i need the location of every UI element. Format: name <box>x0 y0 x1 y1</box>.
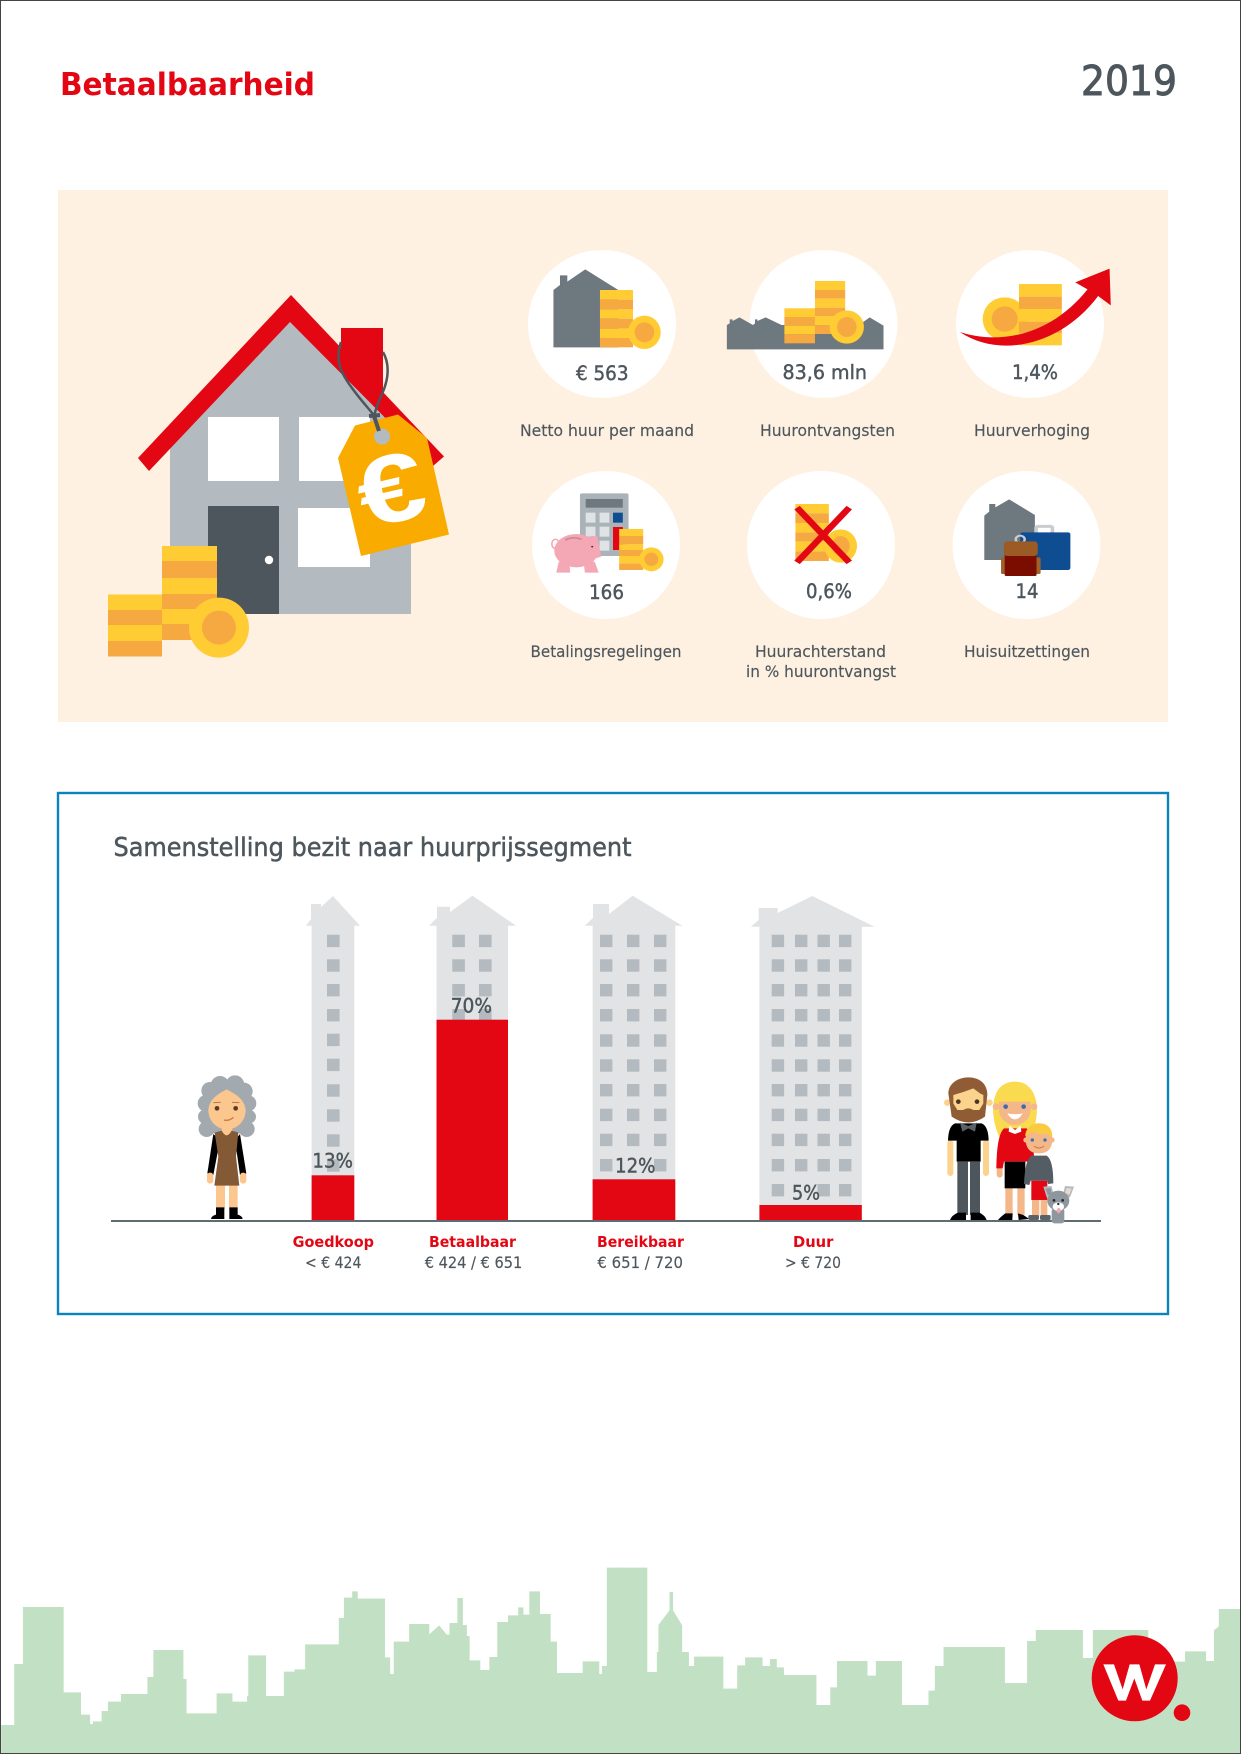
panel: kerncijfers <box>58 190 1168 722</box>
category: bereikbaar: Bereikbaar <box>597 1233 684 1251</box>
category: bereikbaar: € 651 / 720 <box>597 1253 683 1272</box>
man <box>944 1077 993 1220</box>
tower: bereikbaar: 12% <box>615 1155 656 1178</box>
skyline <box>1 1568 1240 1754</box>
circle: huurontvangsten <box>750 250 898 398</box>
label: betalingsregelingen: Betalingsregelingen <box>530 642 682 661</box>
label: huurontvangsten: Huurontvangsten <box>760 421 895 440</box>
tower: duur <box>751 896 874 1220</box>
icon: coins with rising arrow <box>960 269 1111 346</box>
panel: samenstelling bezit <box>58 793 1168 1314</box>
circle: huisuitzettingen <box>952 471 1100 619</box>
value: netto huur: € 563 <box>576 362 628 385</box>
category: betaalbaar <box>425 1233 522 1272</box>
category: betaalbaar: € 424 / € 651 <box>425 1253 522 1272</box>
tower: bereikbaar <box>585 896 682 1220</box>
dog <box>1043 1186 1074 1223</box>
category: duur <box>785 1233 841 1272</box>
tower chart <box>111 896 1101 1222</box>
label: huurachterstand in % huurontvangst: Huurachterstand <box>755 642 886 661</box>
value: huurverhoging: 1,4% <box>1012 361 1058 384</box>
icon: calculator, piggy bank and coins <box>552 493 664 573</box>
illustration: house with price tag and coins: € <box>346 430 436 549</box>
logo: W. <box>1092 1635 1190 1721</box>
circle: huurverhoging <box>956 250 1104 398</box>
category: bereikbaar <box>597 1233 684 1272</box>
figure: family with dog <box>944 1077 1074 1223</box>
title: Betaalbaarheid <box>60 67 315 103</box>
tower: goedkoop <box>306 896 360 1220</box>
label: huurachterstand in % huurontvangst: in % huurontvangst <box>746 662 896 681</box>
label: netto huur per maand: Netto huur per maand <box>520 421 694 440</box>
category: goedkoop: Goedkoop <box>293 1233 374 1251</box>
category: duur: Duur <box>793 1233 834 1251</box>
label: huurachterstand in % huurontvangst <box>746 642 896 681</box>
icon: house with luggage <box>984 499 1070 576</box>
tower: goedkoop: 13% <box>312 1150 353 1173</box>
tower: betaalbaar: 70% <box>451 995 492 1018</box>
figure: older woman <box>198 1075 256 1219</box>
value: huurontvangsten: 83,6 mln <box>782 361 867 384</box>
label: huurverhoging: Huurverhoging <box>974 421 1090 440</box>
tower: duur: 5% <box>792 1181 820 1204</box>
category: goedkoop <box>293 1233 374 1272</box>
circle: betalingsregelingen <box>532 471 680 619</box>
icon: row of houses with coins <box>727 281 884 349</box>
circle: netto huur <box>528 250 676 398</box>
value: huisuitzettingen: 14 <box>1016 580 1038 603</box>
boy <box>1023 1123 1055 1220</box>
circle: huurachterstand <box>747 471 895 619</box>
woman <box>993 1082 1037 1220</box>
icon: house with coins <box>553 269 661 349</box>
year: 2019 <box>1081 57 1177 105</box>
label: huisuitzettingen: Huisuitzettingen <box>964 642 1090 661</box>
category: betaalbaar: Betaalbaar <box>429 1233 516 1251</box>
icon: crossed-out coins <box>795 504 857 563</box>
chart heading: Samenstelling bezit naar huurprijssegment <box>114 833 632 863</box>
value: betalingsregelingen: 166 <box>589 581 624 604</box>
category: duur: > € 720 <box>785 1253 841 1272</box>
tower: betaalbaar <box>429 896 516 1220</box>
value: huurachterstand: 0,6% <box>806 580 852 603</box>
illustration: house with price tag and coins <box>108 295 449 658</box>
category: goedkoop: < € 424 <box>305 1253 361 1272</box>
